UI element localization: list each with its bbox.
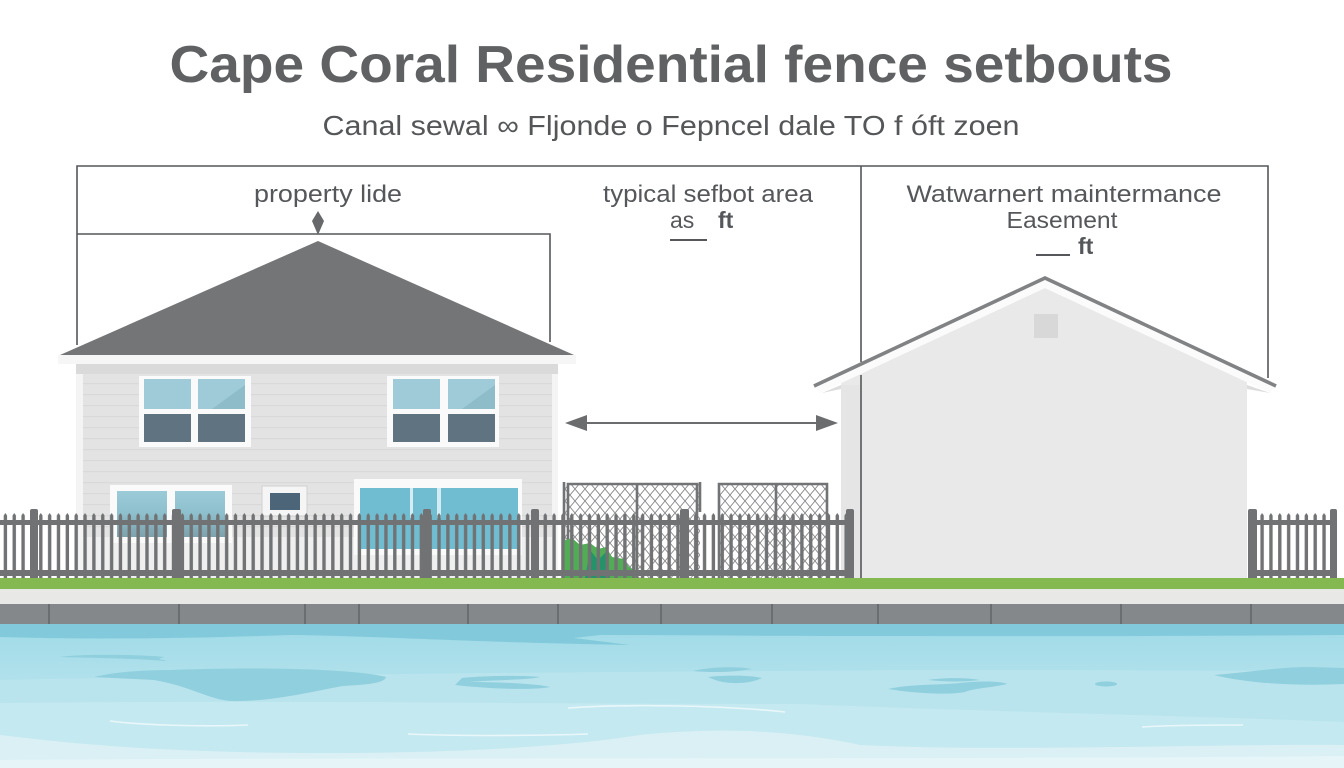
label: waterfront maintenance easement: Watwarnert maintermance bbox=[906, 181, 1222, 208]
house roof bbox=[58, 241, 576, 364]
eave undersides bbox=[822, 385, 1270, 393]
neighbouring building bbox=[814, 278, 1276, 578]
lower right window bbox=[354, 479, 522, 555]
house wall bbox=[76, 364, 558, 578]
roof vent bbox=[1034, 314, 1058, 338]
chain-link fence panels bbox=[564, 482, 828, 578]
upper right window bbox=[387, 376, 499, 447]
water highlights bbox=[110, 706, 1243, 736]
small door window bbox=[262, 486, 307, 516]
grass strip bbox=[0, 578, 1344, 589]
water shadows bbox=[60, 655, 1344, 701]
label: waterfront maintenance easement bbox=[906, 181, 1222, 259]
label: typical setback area: ft bbox=[718, 207, 734, 233]
shrub bbox=[563, 538, 636, 578]
centre dimension line lower segment bbox=[860, 375, 862, 578]
label: waterfront maintenance easement: ft bbox=[1078, 233, 1094, 259]
gable roof bbox=[814, 278, 1276, 393]
label: typical setback area: as bbox=[670, 207, 694, 233]
subtitle: Canal sewal ∞ Fljonde o Fepncel dale TO f óft zoen bbox=[322, 110, 1020, 141]
label: typical setback area bbox=[603, 181, 814, 241]
seawall face bbox=[0, 604, 1344, 624]
picket fence: main run bbox=[0, 509, 854, 580]
house: main building bbox=[58, 241, 576, 578]
dimension frame lines bbox=[77, 166, 1268, 378]
upper left window bbox=[139, 376, 251, 447]
label: typical setback area: typical sefbot area bbox=[603, 181, 814, 208]
lower left window bbox=[110, 485, 232, 543]
label: property line: property lide bbox=[254, 181, 402, 208]
label: property line bbox=[254, 181, 402, 235]
picket fence: right run bbox=[1248, 509, 1337, 580]
label: waterfront maintenance easement: Easement bbox=[1006, 207, 1118, 233]
setback arrow bbox=[565, 415, 838, 431]
canal water bbox=[0, 624, 1344, 768]
gable wall and side strip bbox=[841, 288, 1247, 578]
title: Cape Coral Residential fence setbouts bbox=[170, 36, 1172, 94]
seawall cap bbox=[0, 589, 1344, 604]
